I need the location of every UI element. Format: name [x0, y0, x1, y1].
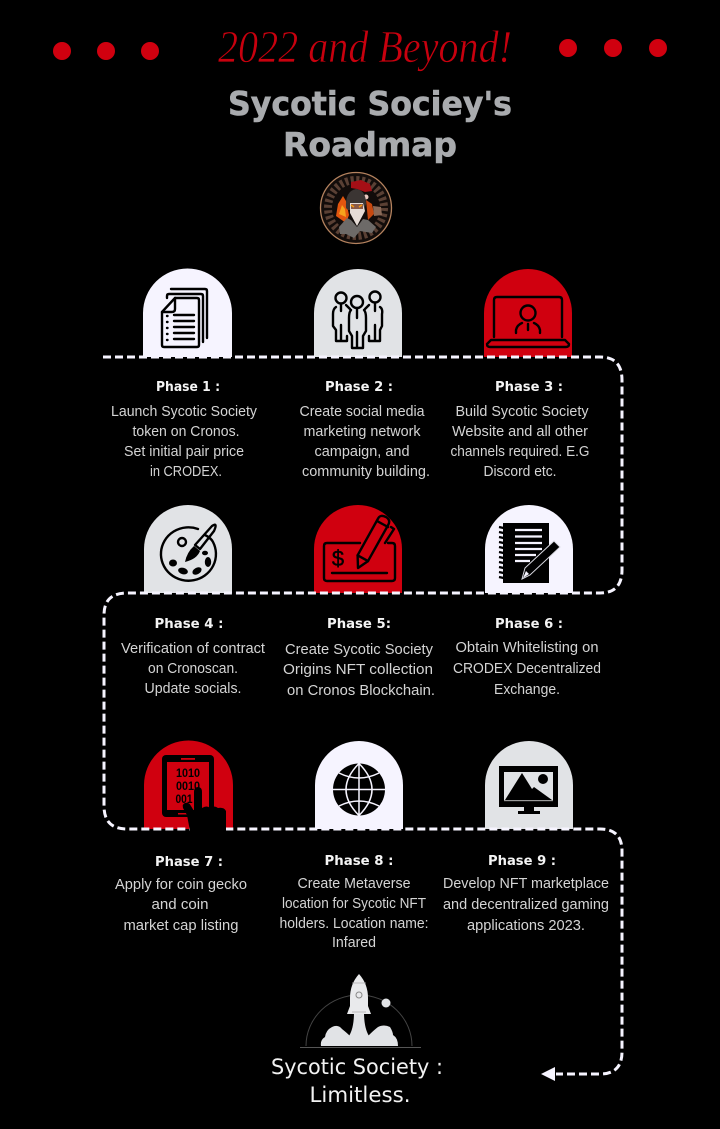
phase 2: campaign, and	[314, 444, 410, 460]
phase 1	[111, 379, 258, 480]
closing caption	[271, 1055, 443, 1107]
icon: pointing hand	[183, 787, 226, 831]
phase 8: Phase 8 :	[324, 853, 394, 869]
phase 1: Set initial pair price	[124, 444, 244, 460]
phase 3: channels required. E.G	[450, 444, 590, 460]
icon: notepad and pencil	[499, 523, 560, 583]
icon: tablet	[162, 755, 214, 817]
phase 7: Phase 7 :	[155, 854, 223, 870]
phase 4: Verification of contract	[121, 641, 265, 657]
phase 7: and coin	[152, 897, 208, 913]
icon: rocket launch	[300, 974, 421, 1048]
phase 8: holders. Location name:	[280, 916, 428, 932]
phase 1: Phase 1 :	[156, 379, 220, 395]
script heading: 2022 and Beyond!	[218, 21, 512, 72]
phase 8: location for Sycotic NFT	[282, 896, 426, 912]
phase 5: Phase 5:	[327, 616, 391, 632]
phase 3: Website and all other	[452, 424, 588, 440]
arrowhead	[541, 1067, 555, 1081]
phase 5: on Cronos Blockchain.	[287, 683, 435, 699]
decorative dots right	[559, 39, 667, 57]
decorative dots left	[53, 42, 159, 60]
phase 1: token on Cronos.	[132, 424, 240, 440]
phase 6: Obtain Whitelisting on	[456, 640, 598, 656]
phase 3	[450, 379, 590, 480]
phase 2: marketing network	[304, 424, 421, 440]
icon: image on monitor	[499, 766, 558, 814]
icon: tablet: 0010	[176, 779, 200, 793]
icon: tablet: 001	[176, 792, 193, 806]
icon: painter palette	[161, 525, 216, 581]
phase 1: Launch Sycotic Society	[111, 404, 258, 420]
title: Sycotic Sociey's	[228, 84, 512, 123]
phase 2: Phase 2 :	[325, 379, 393, 395]
closing caption: Sycotic Society :	[271, 1055, 443, 1079]
phase 7: Apply for coin gecko	[115, 877, 247, 893]
roadmap dashed route	[103, 357, 622, 1074]
domes row 2	[144, 505, 573, 593]
title	[228, 84, 512, 164]
domes row 1	[143, 268, 572, 357]
phase 3: Phase 3 :	[495, 379, 563, 395]
phase 7	[115, 854, 247, 934]
phase 6: CRODEX Decentralized	[453, 661, 601, 677]
phase 9: Develop NFT marketplace	[443, 876, 609, 892]
closing caption: Limitless.	[310, 1083, 410, 1107]
phase 5	[283, 616, 435, 699]
phase 2: Create social media	[300, 404, 425, 420]
phase 3: Discord etc.	[484, 464, 556, 480]
phase 7: market cap listing	[124, 918, 238, 934]
phase 8: Infared	[332, 935, 376, 951]
phase 4: Update socials.	[144, 681, 242, 697]
icon: cheque and pen	[324, 516, 395, 581]
phase 6	[453, 616, 601, 698]
phase 2: community building.	[302, 464, 430, 480]
phase 2	[300, 379, 430, 480]
phase 8: Create Metaverse	[298, 876, 410, 892]
phase 9	[443, 853, 609, 934]
phase 4: Phase 4 :	[154, 616, 224, 632]
phase 6: Exchange.	[494, 682, 560, 698]
icon: documents	[162, 289, 207, 347]
icon: cheque and pen: $	[332, 546, 344, 571]
icon: tablet: 1010	[176, 766, 200, 780]
phase 5: Create Sycotic Society	[285, 642, 434, 658]
domes row 3	[144, 740, 573, 829]
phase 6: Phase 6 :	[495, 616, 563, 632]
phase 9: applications 2023.	[467, 918, 585, 934]
phase 1: in CRODEX.	[150, 464, 222, 480]
phase 8	[280, 853, 428, 951]
title: Roadmap	[283, 125, 457, 164]
phase 4: on Cronoscan.	[148, 661, 238, 677]
phase 9: and decentralized gaming	[443, 897, 609, 913]
icon: laptop with user	[487, 297, 569, 347]
phase 4	[121, 616, 265, 697]
logo medallion	[320, 172, 392, 244]
phase 9: Phase 9 :	[488, 853, 556, 869]
phase 5: Origins NFT collection	[283, 662, 433, 678]
phase 3: Build Sycotic Society	[456, 404, 589, 420]
icon: team of people	[333, 292, 382, 348]
icon: globe	[333, 764, 385, 816]
